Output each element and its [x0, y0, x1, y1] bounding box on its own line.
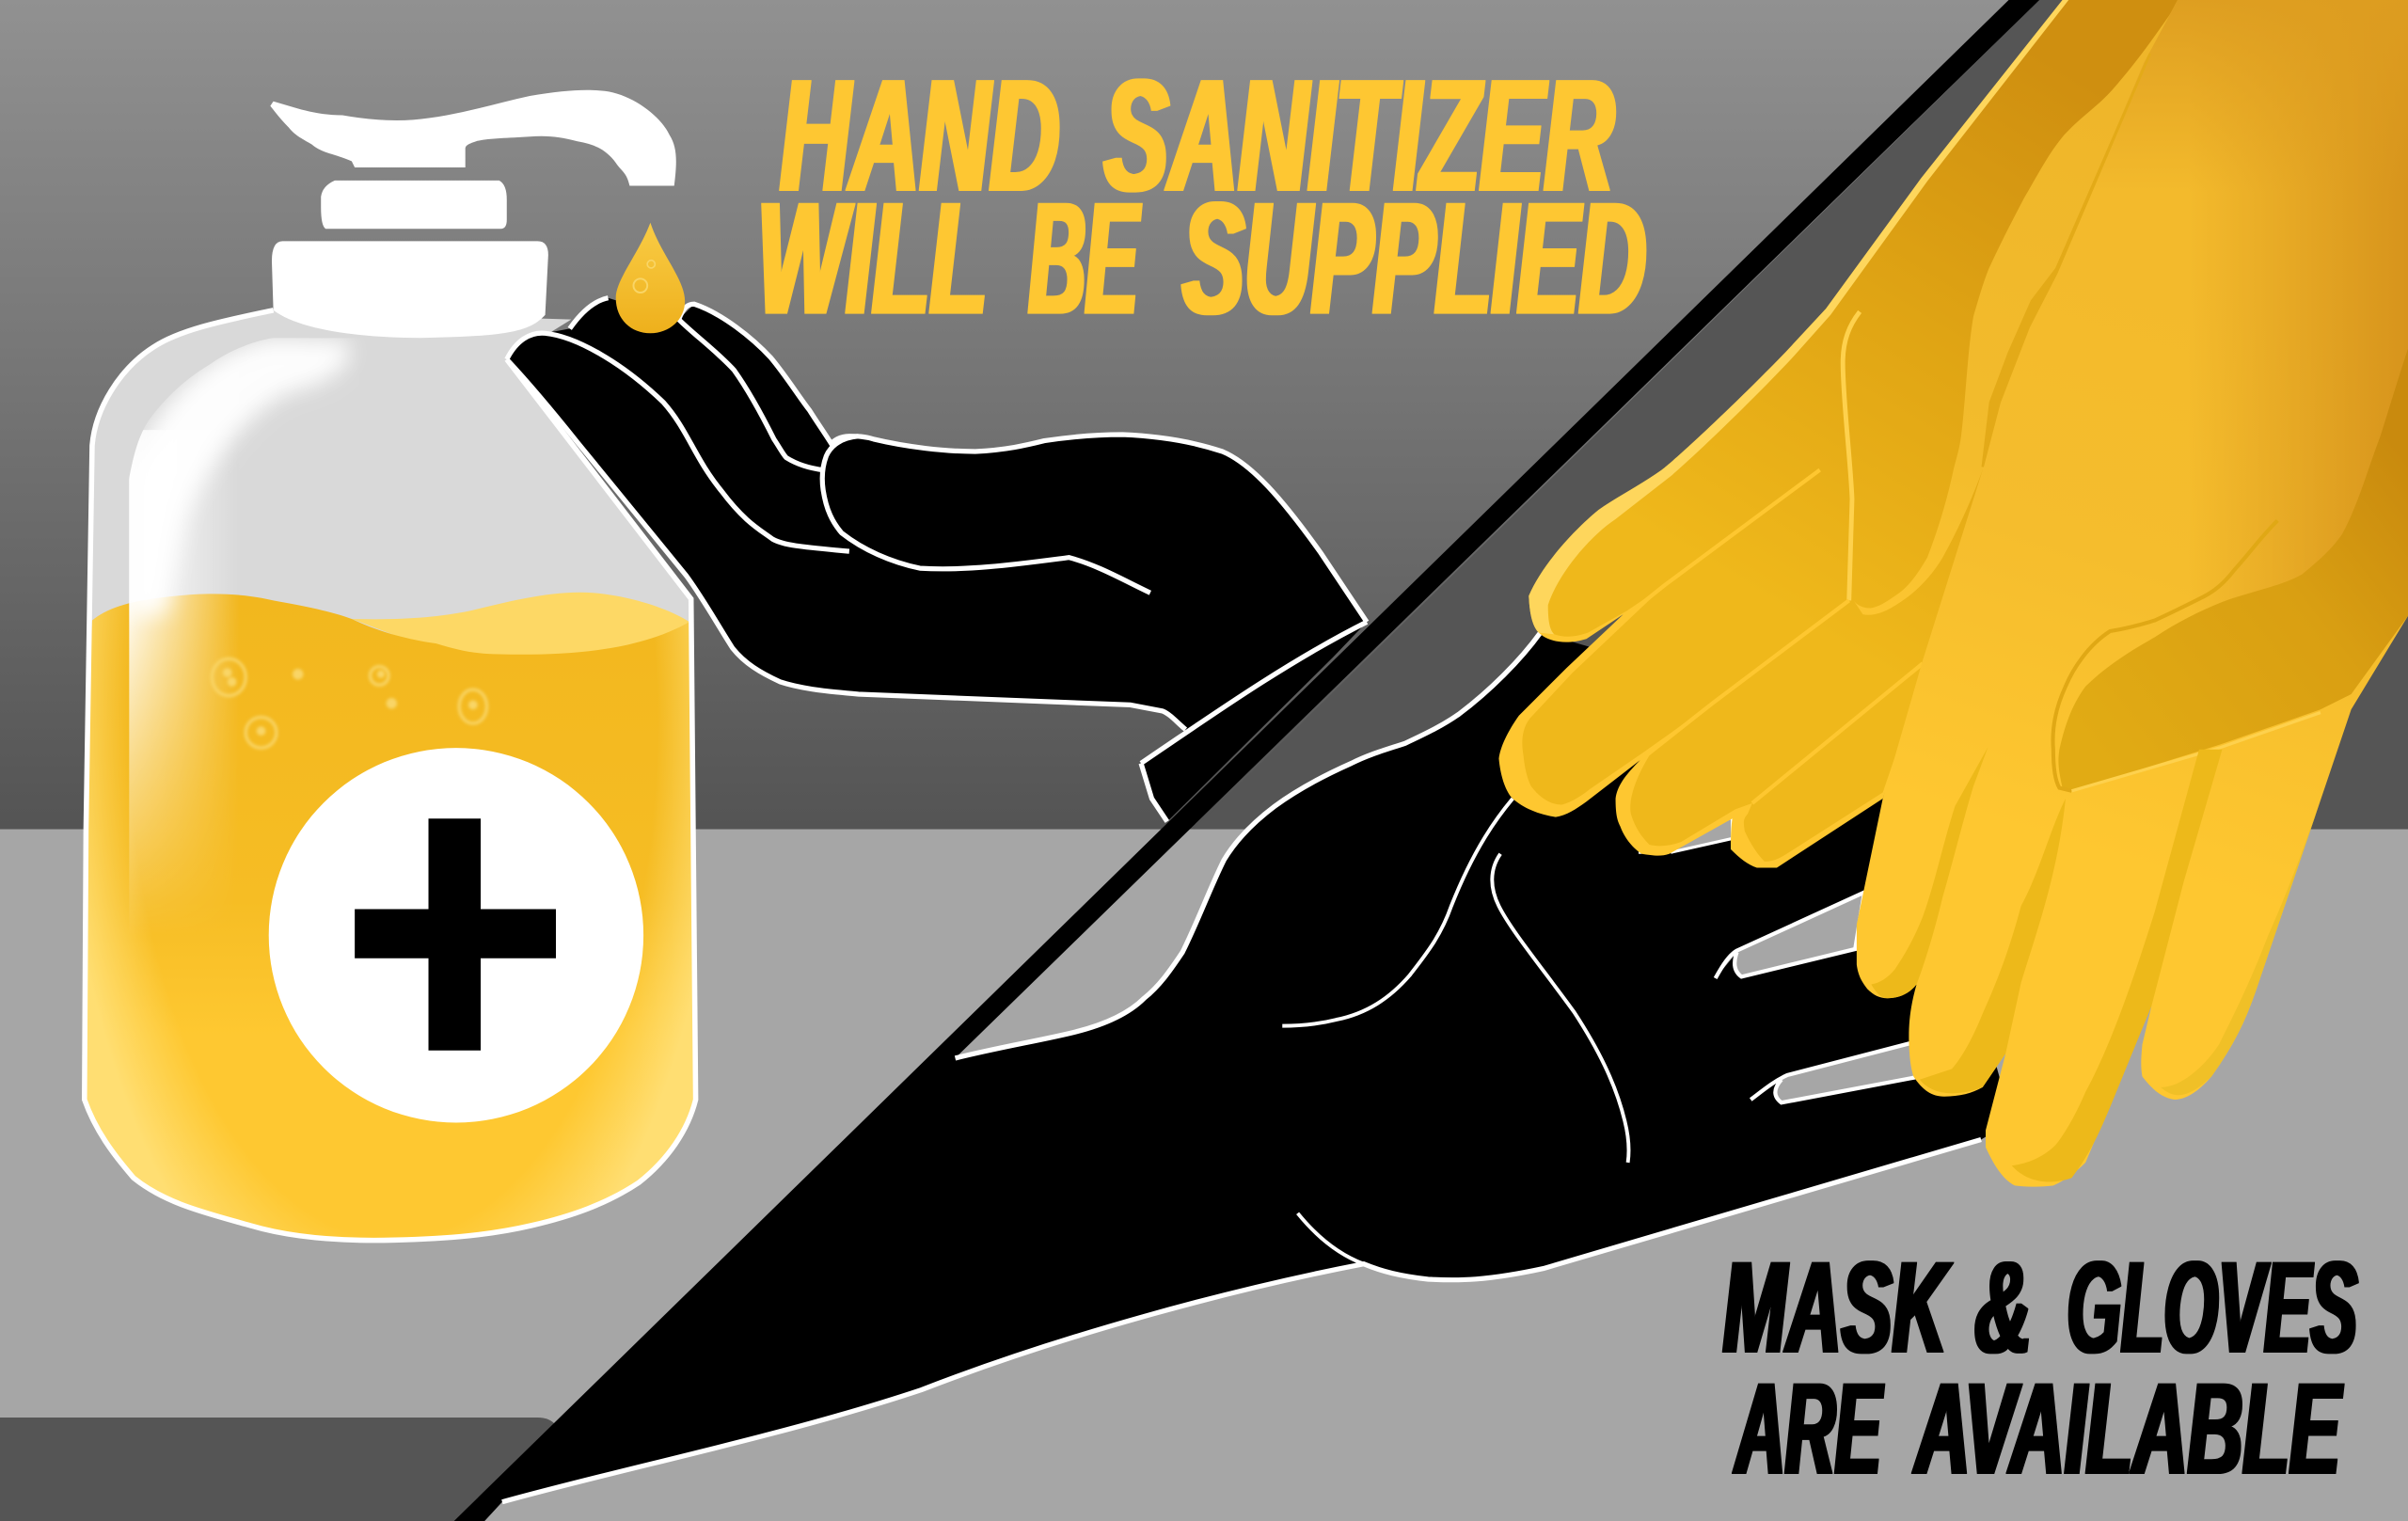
- back glove outer highlight: [1529, 0, 2076, 634]
- front glove shading: [2117, 0, 2408, 598]
- word MASK: MASK: [1723, 1235, 1952, 1381]
- glass highlights: [129, 338, 350, 952]
- hand receiving sanitizer (left of the diagonal): [507, 298, 1367, 821]
- diagonal band and lower hand: [453, 0, 2039, 1521]
- wrist crease line: [1298, 1213, 1364, 1264]
- pump head: [270, 90, 676, 186]
- front glove seam toward cuff: [1983, 54, 2150, 467]
- finger shade three: [2012, 750, 2222, 1181]
- front glove fold patch: [2058, 349, 2408, 791]
- word SUPPLIED: SUPPLIED: [1182, 168, 1646, 347]
- background: lower counter: [0, 830, 2408, 1521]
- drop shape: [616, 223, 685, 333]
- glass highlight strip: [129, 430, 235, 920]
- finger shade four: [2161, 780, 2326, 1095]
- front glove fold highlight: [2071, 713, 2321, 791]
- finger gap lower: [1751, 1043, 1920, 1102]
- back glove base: [1498, 0, 2180, 867]
- liquid edge glow: [87, 604, 693, 1235]
- finger line one: [507, 333, 849, 551]
- bubbles: [212, 658, 487, 748]
- finger gap middle: [1640, 817, 1733, 854]
- front glove: [1857, 0, 2408, 1187]
- hand silhouette: [507, 298, 1367, 821]
- sanitizer drop: [616, 223, 685, 333]
- heading: hand sanitizer: [757, 45, 1646, 347]
- word ARE: ARE: [1734, 1356, 1883, 1502]
- glass highlight dome: [129, 338, 350, 614]
- forearm bottom outline: [502, 1139, 1981, 1502]
- label circle: [269, 748, 643, 1122]
- background: dark panel right of diagonal: [1194, 0, 2408, 830]
- bottle: [77, 90, 704, 1275]
- thumb line: [822, 436, 1150, 593]
- hand outer outline: [507, 298, 1367, 821]
- liquid back surface: [352, 593, 689, 660]
- word HAND: HAND: [780, 45, 1060, 224]
- bottle cap: [272, 241, 548, 338]
- word SANITIZER: SANITIZER: [1104, 45, 1614, 224]
- word BE: BE: [1029, 168, 1140, 347]
- thumb crease line: [1282, 799, 1513, 1026]
- palm crease line: [1492, 854, 1629, 1163]
- forearm top outline: [956, 633, 1541, 1058]
- bottle glass body: [85, 310, 696, 1241]
- word WILL: WILL: [757, 168, 988, 347]
- back glove thumb seam: [1843, 311, 1860, 600]
- right shading: [2231, 33, 2408, 598]
- front glove fold crease: [2052, 520, 2277, 791]
- finger shade two: [1920, 799, 2066, 1093]
- black diagonal with forearm silhouette: [453, 0, 2039, 1521]
- ampersand: &: [1975, 1235, 2032, 1381]
- background: upper wall gradient: [0, 0, 2408, 830]
- finger gap upper: [1716, 893, 1864, 978]
- pump collar: [321, 181, 507, 229]
- medical cross: [355, 818, 556, 1051]
- liquid: [77, 338, 704, 1275]
- background: dark base block: [0, 1418, 556, 1521]
- back glove finger seams: [1626, 470, 1923, 803]
- back glove fill: [1522, 0, 2180, 862]
- finger line two: [679, 320, 823, 470]
- back glove lighter panel: [1854, 0, 2196, 615]
- liquid main: [77, 594, 704, 1275]
- bottle outline: [85, 310, 696, 1241]
- top shading: [2117, 0, 2408, 135]
- heading: mask and gloves: [1723, 1235, 2357, 1502]
- gloves: [1498, 0, 2408, 1187]
- finger shade one: [1871, 747, 1988, 998]
